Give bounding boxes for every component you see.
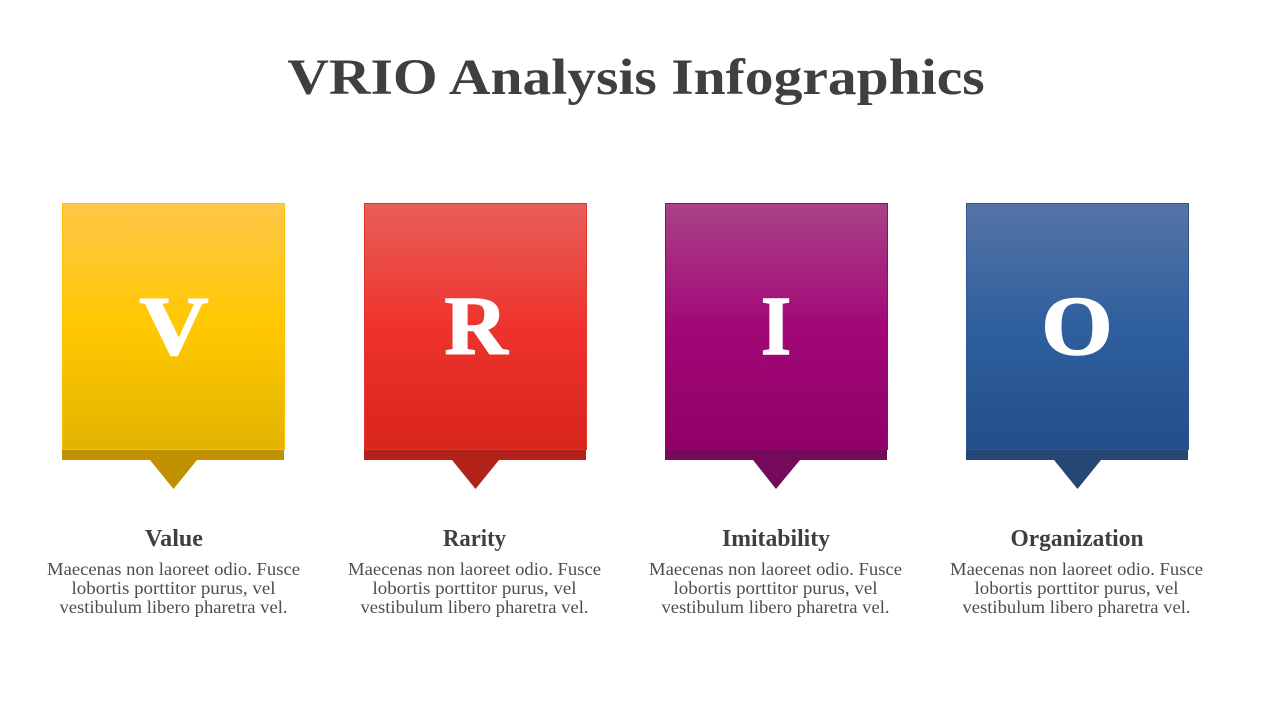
description: value: vestibulum libero pharetra vel.	[60, 597, 288, 617]
card: rarity	[364, 204, 586, 450]
pointer: imitability	[665, 450, 887, 489]
pointer: value	[62, 450, 284, 489]
card: organization	[966, 204, 1188, 450]
pointer: rarity	[364, 450, 586, 489]
card: value	[62, 204, 284, 450]
description: organization: vestibulum libero pharetra vel.	[962, 597, 1190, 617]
description: organization: Maecenas non laoreet odio. Fusce	[950, 559, 1203, 579]
description: imitability: Maecenas non laoreet odio. Fusce	[649, 559, 902, 579]
panel: value	[47, 204, 300, 617]
panel: imitability	[649, 204, 902, 617]
card: imitability	[666, 204, 888, 450]
panel: organization	[950, 204, 1203, 617]
letter: I: I	[761, 280, 791, 373]
description: rarity: Maecenas non laoreet odio. Fusce	[348, 559, 601, 579]
description: value: Maecenas non laoreet odio. Fusce	[47, 559, 300, 579]
heading: value: Value	[145, 526, 203, 552]
description: rarity: vestibulum libero pharetra vel.	[360, 597, 588, 617]
letter: R: R	[444, 280, 509, 373]
heading: imitability: Imitability	[722, 526, 830, 552]
panel: rarity	[348, 204, 601, 617]
letter: O: O	[1041, 280, 1113, 373]
description: imitability: vestibulum libero pharetra vel.	[662, 597, 890, 617]
description: imitability: lobortis porttitor purus, vel	[674, 578, 878, 598]
title: VRIO Analysis Infographics	[287, 49, 985, 105]
heading: rarity: Rarity	[443, 526, 506, 552]
heading: organization: Organization	[1010, 526, 1144, 552]
description: organization: lobortis porttitor purus, vel	[974, 578, 1178, 598]
pointer: organization	[966, 450, 1188, 489]
description: value: lobortis porttitor purus, vel	[72, 578, 276, 598]
letter: V: V	[139, 280, 209, 373]
description: rarity: lobortis porttitor purus, vel	[372, 578, 576, 598]
